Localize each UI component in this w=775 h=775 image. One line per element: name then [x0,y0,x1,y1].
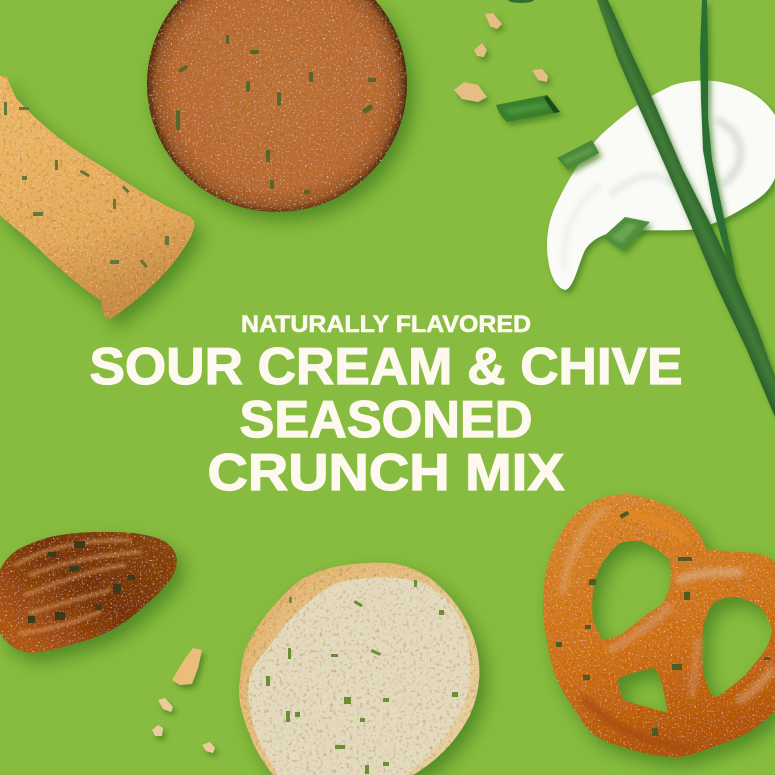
title line 2: SEASONED [240,391,532,449]
cracker herb flecks [176,35,376,194]
pretzel sugar bands [563,510,772,748]
almond seasoning [28,541,135,623]
cream swirl shading [564,120,740,270]
bread crumb face [248,577,470,775]
chive piece lower [603,217,650,251]
long chive stem [597,0,775,417]
pretzel herb flecks [556,511,770,736]
almond [0,532,177,653]
title line 1: SOUR CREAM & CHIVE [90,338,682,396]
title line 3: CRUNCH MIX [208,444,565,502]
eyebrow: NATURALLY FLAVORED [241,311,531,338]
pastry herb flecks [4,102,169,268]
thin chive stem [700,0,740,297]
round toasted cracker [147,0,407,212]
small chive at top edge [508,0,534,3]
rolled pastry stick [0,76,194,318]
chive piece top [496,95,560,122]
crumbs top [454,13,548,102]
crumbs bottom [152,648,215,753]
round bread crisp [239,563,479,775]
bread herb flecks [266,580,458,774]
sour cream dollop [547,81,775,290]
chive piece middle [557,140,599,170]
almond ridges [15,540,140,633]
pretzel [543,494,775,757]
heading text [90,311,682,502]
